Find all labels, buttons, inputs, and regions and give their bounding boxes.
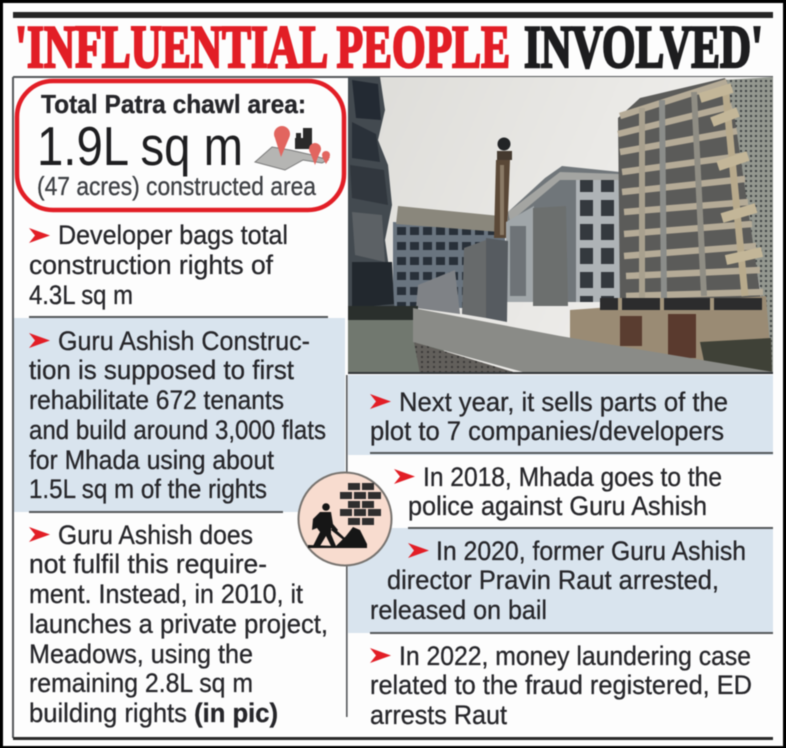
text block: 2022: arrests Raut (370, 700, 507, 730)
icon: map with pins (255, 126, 330, 170)
title: 'INFLUENTIAL PEOPLE (15, 14, 510, 80)
icon: bricks (340, 483, 381, 525)
text block: 2020: director Pravin Raut arrested, (387, 565, 719, 595)
ground (348, 306, 520, 374)
floor slabs (618, 82, 763, 296)
text block: private project: launches a private project, (29, 609, 328, 639)
text block: sells plot: Next year, it sells parts of the (399, 387, 728, 417)
text block: 2022: related to the fraud registered, ED (370, 670, 752, 700)
text block: private project (29, 520, 328, 728)
text block: sells plot: plot to 7 companies/developers (370, 416, 724, 446)
text block: rehabilitation requirement: tion is supposed to first (29, 355, 294, 385)
text block: construction rights (29, 220, 288, 310)
callout subtext: (47 acres) constructed area (37, 171, 316, 201)
podium (570, 296, 772, 372)
text block: construction rights: construction rights of (29, 250, 273, 280)
text block: private project: Guru Ashish does (58, 520, 253, 550)
text block: 2022 (370, 641, 752, 730)
tall tan block with dotted side wall (618, 77, 773, 374)
icon: worker with shovel (308, 503, 367, 548)
text block: 2022: In 2022, money laundering case (399, 641, 751, 671)
text block: rehabilitation requirement: for Mhada using about (29, 445, 274, 475)
text block: rehabilitation requirement: Guru Ashish Construc- (58, 326, 310, 356)
mid-rise block (506, 166, 622, 306)
callout: total area (17, 81, 344, 210)
text block: 2020 (370, 536, 746, 625)
text block: sells plot (370, 387, 728, 446)
text block: private project: remaining 2.8L sq m (29, 668, 253, 698)
dark tower, far left (348, 77, 395, 320)
low block, left (393, 206, 505, 308)
text block: private project: ment. Instead, in 2010, it (29, 579, 303, 609)
text block: rehabilitation requirement: and build around 3,000 flats (29, 415, 326, 445)
text block: construction rights: Developer bags total (58, 220, 288, 250)
top heavy rule (13, 12, 773, 18)
text block: rehabilitation requirement (29, 326, 326, 504)
text block: rehabilitation requirement: 1.5L sq m of the rights (29, 474, 267, 504)
callout heading: Total Patra chawl area: (41, 89, 306, 119)
callout figure: 1.9L sq m (37, 115, 243, 177)
icon: worker and brick wall (298, 472, 392, 566)
text block: private project: building rights (in pic) (29, 698, 278, 728)
panel backgrounds (14, 318, 773, 633)
foreground wall (413, 308, 773, 374)
columns (642, 92, 704, 300)
text block: 2018: In 2018, Mhada goes to the (423, 462, 722, 492)
text block: 2018 (394, 462, 722, 521)
text block: 2018: police against Guru Ashish (408, 491, 707, 521)
text block: private project: Meadows, using the (29, 639, 253, 669)
photo: Meadows project under construction (348, 77, 773, 374)
text block: rehabilitation requirement: rehabilitate 672 tenants (29, 385, 284, 415)
text block: 2020: In 2020, former Guru Ashish (436, 536, 746, 566)
text block: private project: not fulfil this require- (29, 549, 267, 579)
concrete piers (416, 238, 508, 322)
text block: 2020: released on bail (370, 595, 547, 625)
text block: construction rights: 4.3L sq m (29, 280, 133, 310)
crane (494, 138, 512, 238)
